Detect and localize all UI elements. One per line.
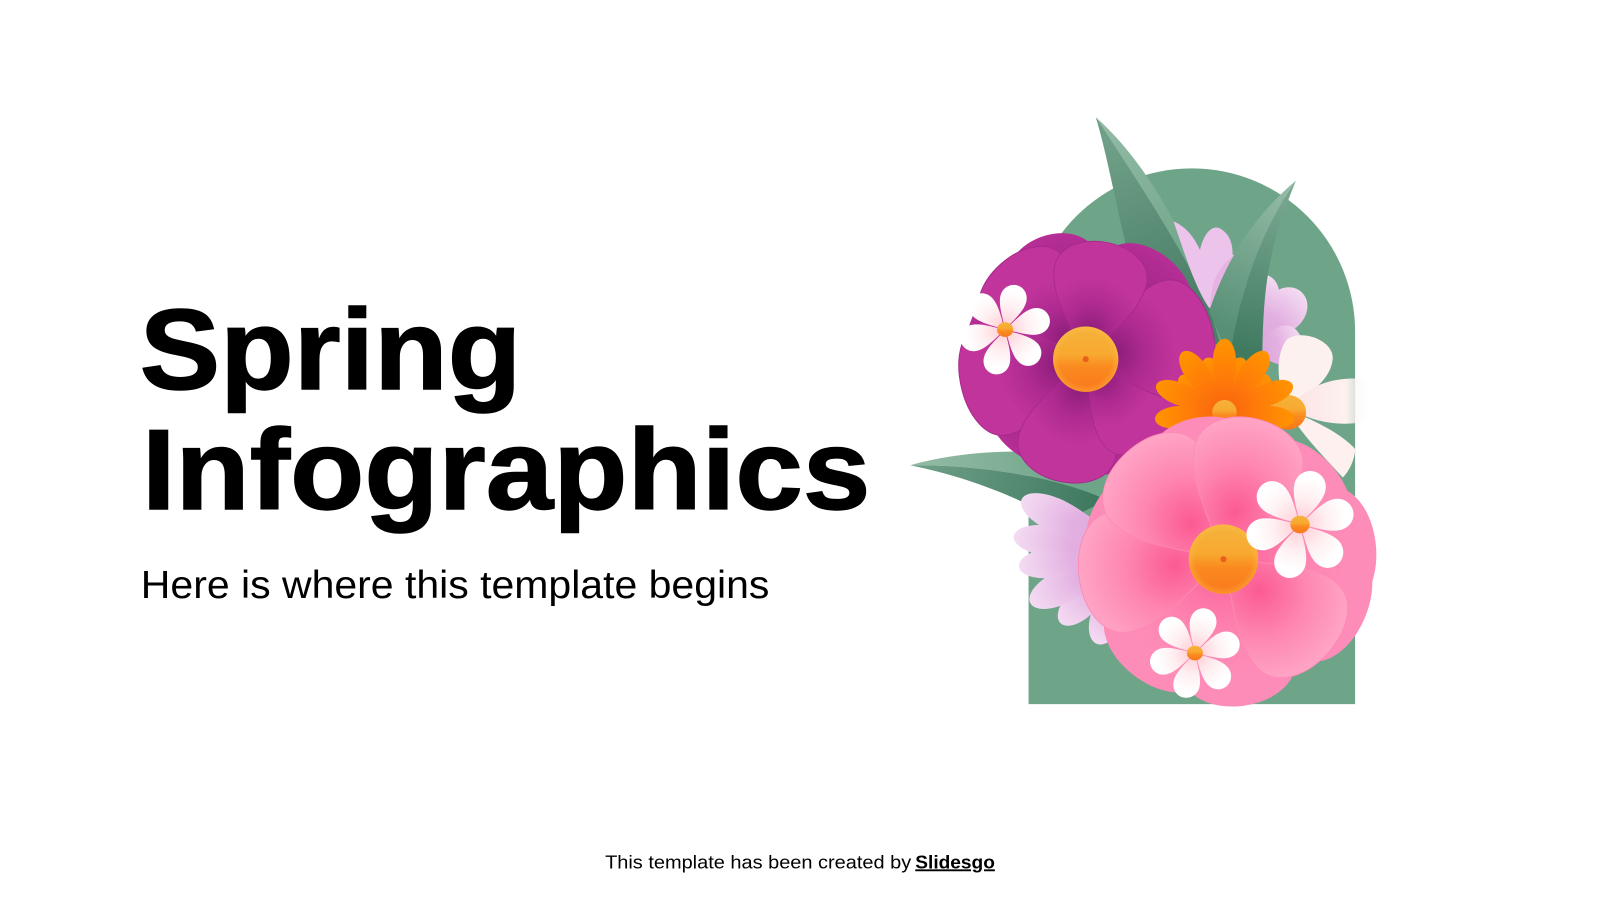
purple flower <box>949 221 1226 492</box>
credit line: Slidesgo <box>915 851 995 872</box>
pink flower centre <box>1189 524 1258 594</box>
small white flower: pink right <box>1243 467 1357 582</box>
credit line: This template has been created by <box>605 851 912 872</box>
title: Infographics <box>142 407 870 534</box>
lavender flower: top <box>1173 221 1243 308</box>
leaf: top left <box>1096 117 1221 347</box>
leaf: top right <box>1209 181 1296 380</box>
pink flower <box>1072 406 1389 714</box>
subtitle: Here is where this template begins <box>141 564 769 607</box>
pink back petals <box>1073 407 1389 714</box>
pink front petals <box>1072 406 1366 696</box>
purple front petals <box>949 229 1226 492</box>
lavender flower: right <box>1232 271 1316 372</box>
purple flower centre <box>1053 327 1118 392</box>
title: Spring <box>140 287 521 414</box>
white flower: right <box>1269 335 1371 478</box>
orange flower <box>1152 339 1297 431</box>
small white flower: purple <box>957 282 1053 377</box>
small white flower: pink bottom <box>1147 605 1243 701</box>
title <box>140 287 870 534</box>
floral illustration <box>910 117 1389 714</box>
green arch <box>1029 168 1355 704</box>
lavender flower: left fan <box>1012 484 1148 650</box>
leaf: left <box>910 452 1107 522</box>
purple back petals <box>956 221 1217 485</box>
